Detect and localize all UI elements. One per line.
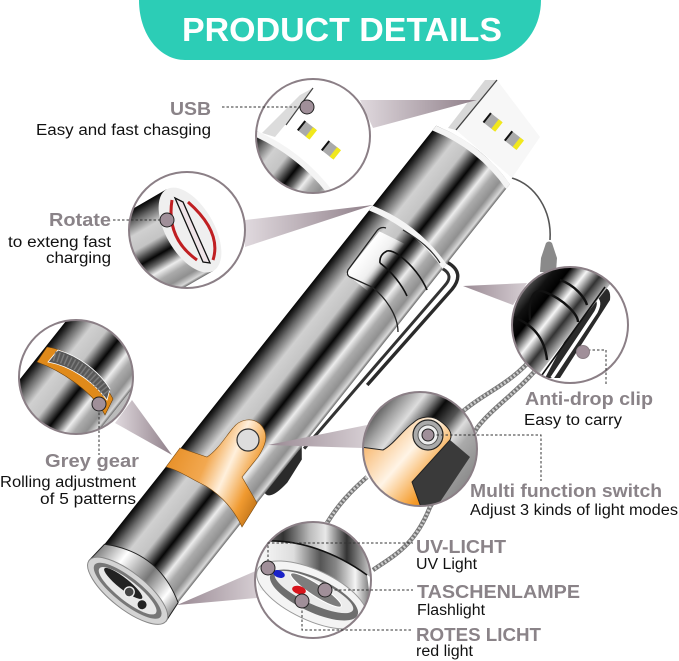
label: Rotate xyxy=(8,209,112,267)
label: Multi function switch xyxy=(470,480,678,519)
label: Grey gear: Rolling adjustment xyxy=(0,474,137,491)
label: Multi function switch: Multi function switch xyxy=(470,480,662,501)
slot xyxy=(175,198,210,263)
title banner: PRODUCT DETAILS xyxy=(182,11,502,48)
orange gear band with switch xyxy=(166,420,266,527)
label: red light: red light xyxy=(416,643,474,660)
circle: rotate detail xyxy=(128,171,246,289)
callout wedge: grey gear xyxy=(115,400,172,455)
title banner xyxy=(139,0,541,60)
middle ring xyxy=(369,200,451,269)
circle: anti-drop clip detail xyxy=(511,266,629,384)
clip plate outlines and ridges xyxy=(347,228,440,332)
label: USB: USB xyxy=(170,98,211,119)
label: Anti-drop clip: Anti-drop clip xyxy=(525,388,653,409)
pen body xyxy=(104,120,514,603)
switch button xyxy=(237,429,259,451)
label: Grey gear: Grey gear xyxy=(45,450,139,471)
clip plate highlight xyxy=(346,227,405,291)
circle: USB detail xyxy=(255,78,371,194)
top ring xyxy=(432,120,514,189)
blue LED xyxy=(273,570,285,578)
label: UV light xyxy=(416,536,507,573)
label: Rotate: Rotate xyxy=(49,209,111,230)
flashlight xyxy=(78,90,553,646)
label: Rotate: charging xyxy=(46,250,111,267)
lanyard rope xyxy=(327,355,540,570)
red LED xyxy=(292,586,306,594)
label: Anti-drop clip xyxy=(524,388,653,429)
label: USB: Easy and fast chasging xyxy=(36,122,211,139)
label: USB xyxy=(36,98,211,139)
callout wedge: clip xyxy=(463,283,527,305)
callout wedge: rotate xyxy=(245,205,373,247)
marker dots xyxy=(92,100,590,608)
pocket clip xyxy=(264,262,464,506)
leader lines xyxy=(99,107,606,630)
label: UV light: UV Light xyxy=(416,556,478,573)
circle: head detail xyxy=(254,521,372,639)
head face xyxy=(78,546,177,635)
label: flashlight xyxy=(417,581,580,619)
callout wedge: switch xyxy=(268,425,367,448)
head ring xyxy=(89,532,188,621)
label: flashlight: TASCHENLAMPE xyxy=(417,581,580,602)
lanyard wire and tag xyxy=(512,178,557,272)
red arrows xyxy=(171,200,215,260)
label: Rotate: to exteng fast xyxy=(8,234,112,251)
label: Grey gear: of 5 patterns xyxy=(40,491,136,508)
label: Anti-drop clip: Easy to carry xyxy=(524,412,622,429)
USB plug xyxy=(448,80,540,178)
label: Multi function switch: Adjust 3 kinds of light modes xyxy=(470,502,678,519)
label: Grey gear xyxy=(0,450,139,508)
label: red light xyxy=(416,624,542,660)
label: flashlight: Flashlight xyxy=(417,602,486,619)
switch button xyxy=(413,420,443,450)
circle: grey gear detail xyxy=(18,319,134,435)
callout wedge: head xyxy=(177,570,258,605)
label: UV light: UV-LICHT xyxy=(416,536,507,557)
circle: switch detail xyxy=(362,391,478,507)
USB contacts xyxy=(482,112,525,150)
label: red light: ROTES LICHT xyxy=(416,624,542,645)
callout wedge: USB xyxy=(360,100,477,128)
